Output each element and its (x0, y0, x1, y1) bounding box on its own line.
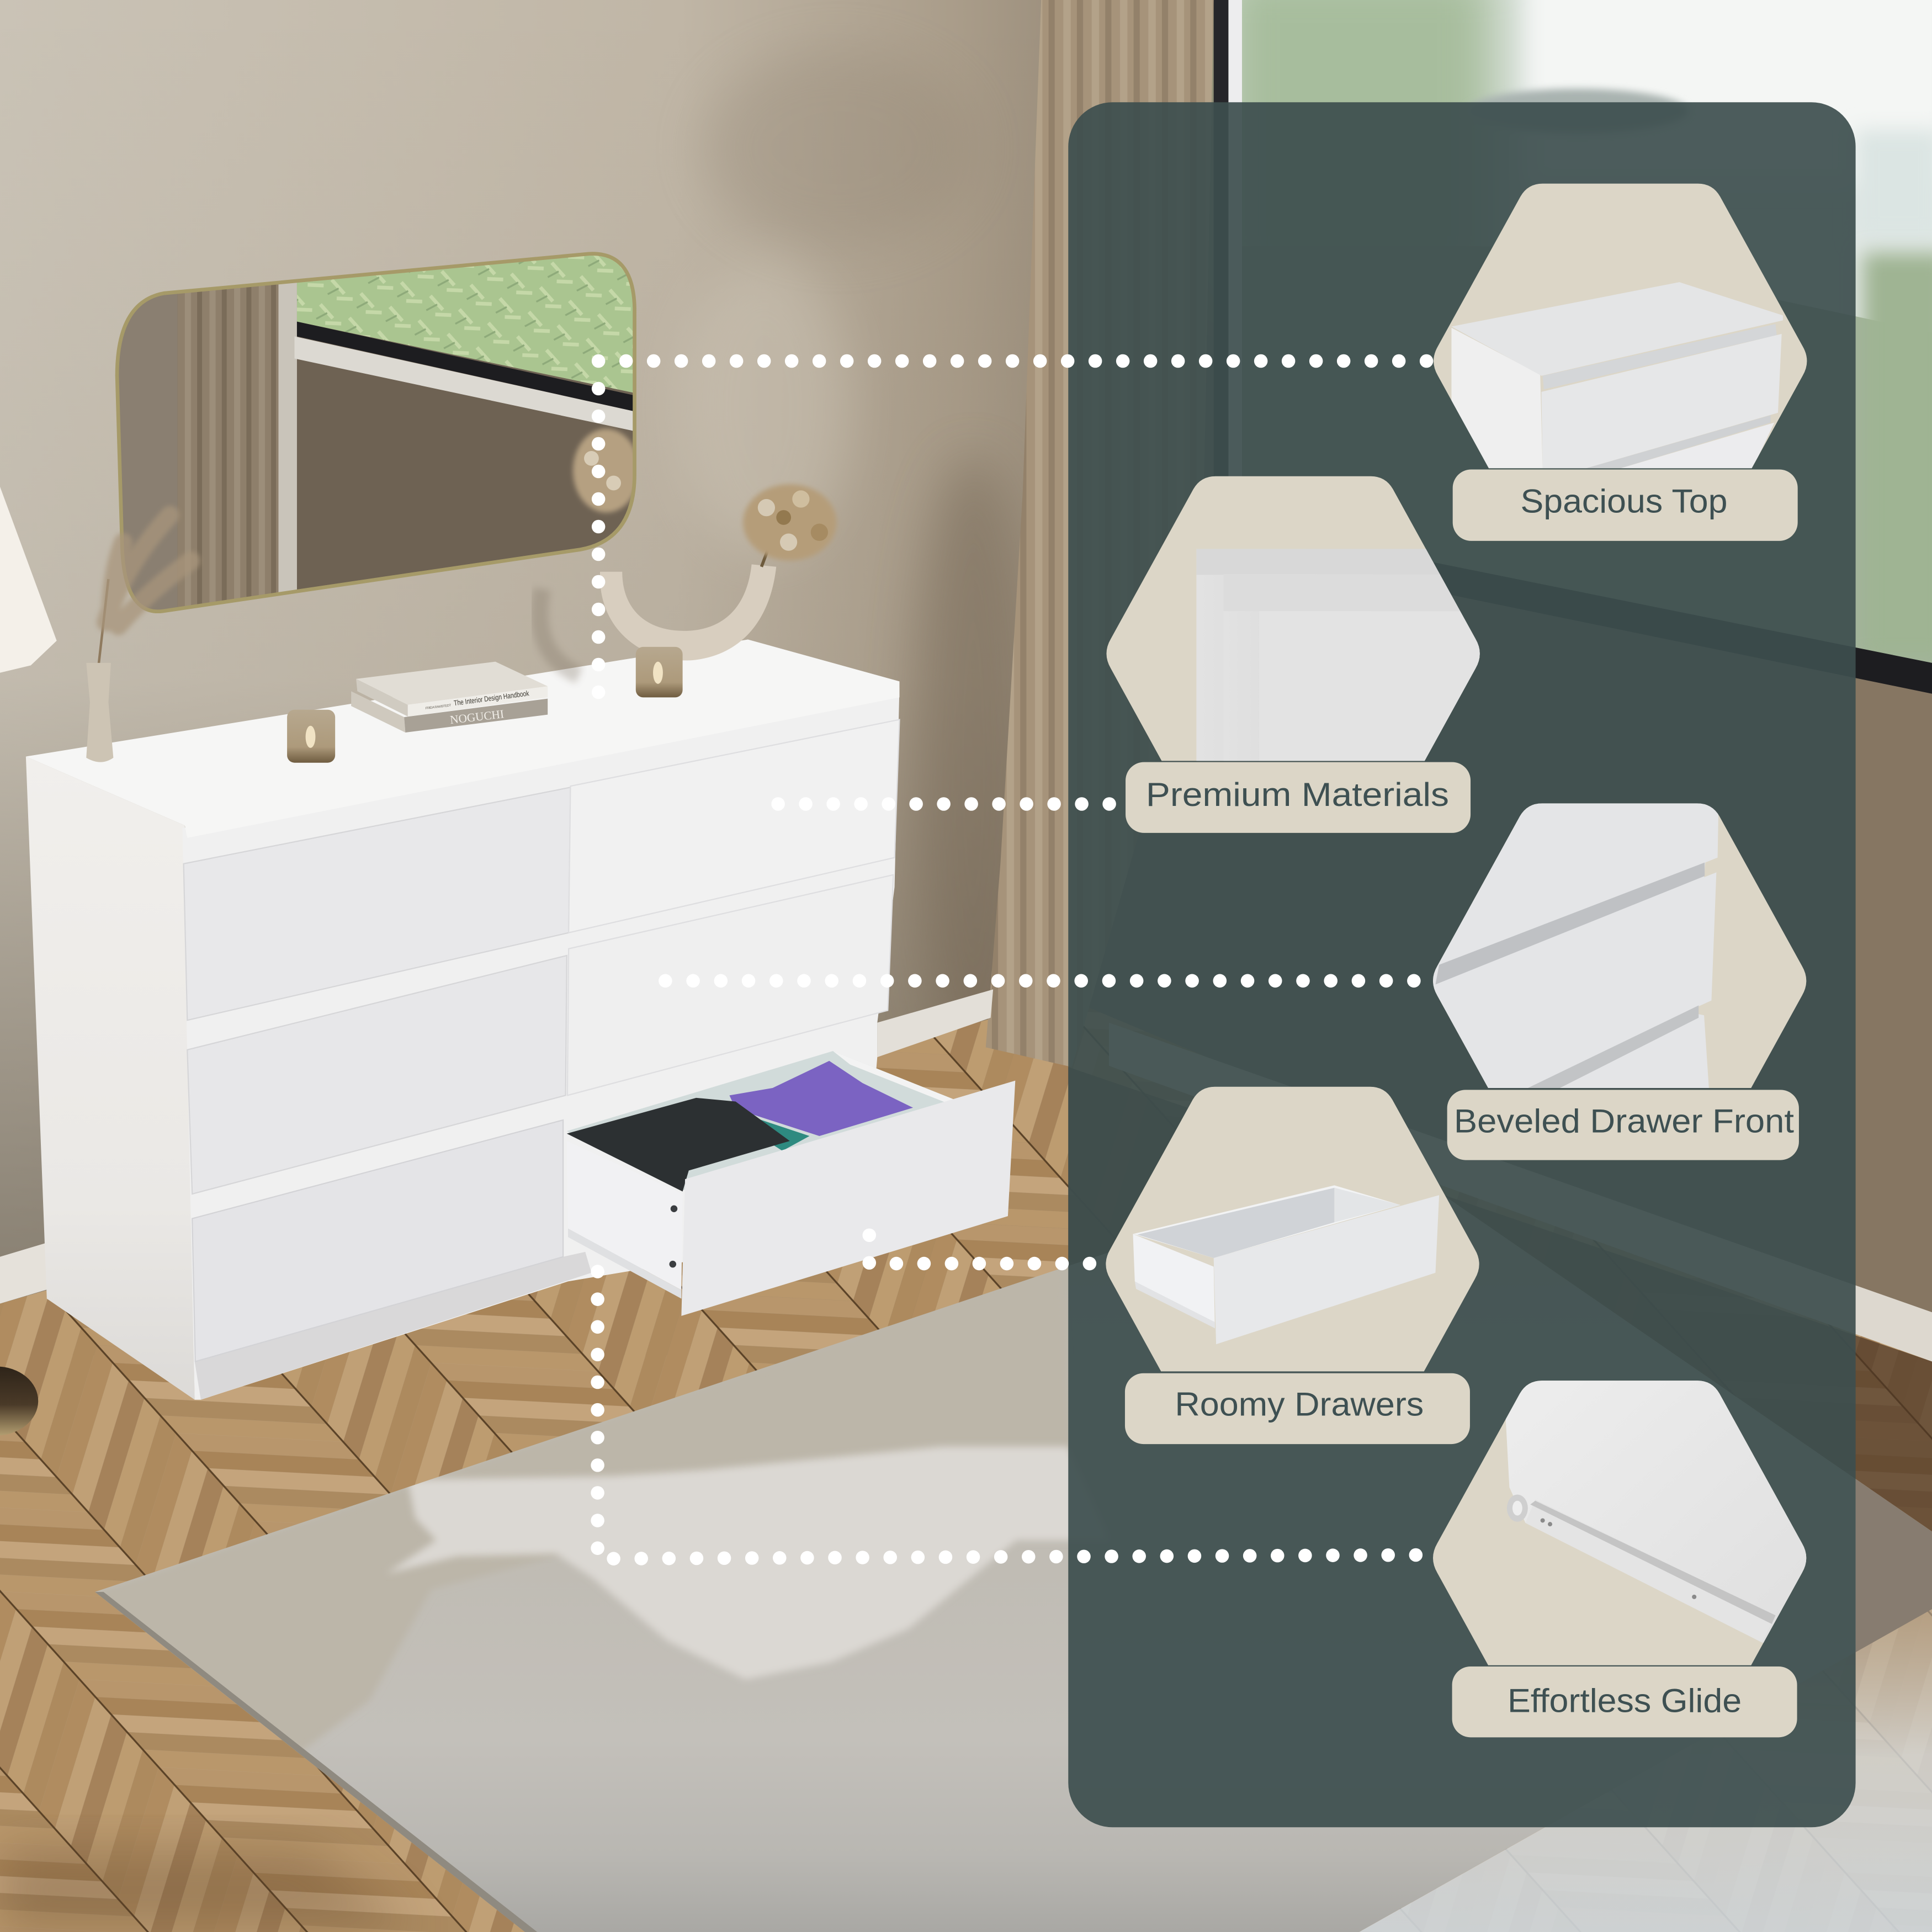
label: spacious top: Spacious Top (1520, 482, 1727, 520)
connector: spacious top (598, 361, 1428, 695)
dresser top (26, 639, 899, 838)
label: roomy drawers: Roomy Drawers (1175, 1386, 1424, 1423)
dresser carcass front (182, 688, 899, 1400)
stacked books (351, 662, 548, 733)
folded teal shirt (736, 1111, 810, 1151)
window view (1220, 0, 1932, 672)
open drawer (567, 1051, 1015, 1316)
translucent feature panel (1068, 102, 1856, 1827)
feature: effortless glide (1433, 1355, 1836, 1737)
curtain (986, 0, 1214, 1067)
label: effortless glide: Effortless Glide (1508, 1682, 1742, 1719)
mirror reflection (111, 240, 641, 616)
mirror frame (117, 254, 635, 612)
floor (0, 1000, 1932, 1932)
drawer rail (568, 1228, 681, 1299)
upper book title: The Interior Design Handbook (453, 689, 529, 707)
connector: effortless glide (598, 1272, 1421, 1559)
hexagon thumbnail: drawer fronts (1405, 789, 1806, 1089)
connector: roomy drawers (869, 1235, 1092, 1265)
dresser side panel (26, 757, 195, 1400)
drawer bottom left (192, 1120, 563, 1362)
vase body (600, 564, 776, 660)
floor shadow lower left (0, 1848, 419, 1932)
connector: beveled drawer front (665, 978, 1417, 984)
glass candle right (636, 647, 683, 697)
drawer top right (569, 720, 899, 933)
folded black shirt (567, 1098, 790, 1191)
lamp base (0, 1366, 38, 1435)
upper book author: FRIDA RAMSTEDT (425, 704, 452, 710)
label: roomy drawers (1125, 1373, 1470, 1444)
lower book spine (404, 699, 548, 733)
left wall (0, 0, 1232, 1355)
drawer middle right (567, 875, 893, 1095)
glass candle left (287, 710, 335, 763)
upper book cover (356, 662, 548, 705)
hexagon thumbnail: dresser top (1434, 184, 1807, 469)
hexagon thumbnail: layered panels (1106, 476, 1495, 765)
hexagon thumbnail: open drawer box (1106, 1087, 1479, 1371)
wall mirror (111, 240, 641, 616)
drawer top left (184, 787, 570, 1020)
folded purple shirt (729, 1061, 913, 1136)
drawer middle left (187, 956, 567, 1194)
pampas grass (99, 515, 191, 665)
lower book side (351, 691, 405, 733)
vase shadow (540, 589, 579, 675)
drawer interior (567, 1051, 956, 1190)
window frame (1214, 0, 1932, 694)
vase (86, 663, 113, 762)
feature: premium materials (1106, 476, 1495, 833)
base plinth (195, 1252, 591, 1400)
feature: beveled drawer front (1405, 789, 1806, 1160)
right wall (1072, 0, 1932, 1368)
label: effortless glide (1452, 1666, 1797, 1737)
upper book spine (408, 686, 548, 716)
baseboards (0, 989, 1932, 1362)
dresser (26, 639, 1015, 1400)
table lamp shade (0, 487, 57, 673)
lower book title: NOGUCHI (449, 707, 505, 726)
label: spacious top (1453, 469, 1798, 541)
label: premium materials (1126, 762, 1471, 833)
rug (95, 1253, 1932, 1932)
dried hydrangea (743, 484, 837, 567)
label: premium materials: Premium Materials (1146, 776, 1449, 813)
screws (669, 1205, 677, 1267)
label: beveled drawer front (1447, 1090, 1799, 1160)
light floor lower right (1359, 1609, 1932, 1932)
feature: spacious top (1434, 184, 1807, 541)
dark floor area (1068, 1067, 1932, 1532)
curved U vase (540, 484, 837, 675)
pampas vase (86, 515, 191, 762)
drawer side (567, 1141, 683, 1290)
feature: roomy drawers (1106, 1087, 1479, 1444)
upper book side (356, 679, 408, 716)
connector: premium materials (778, 801, 1111, 807)
drawer front (681, 1081, 1015, 1316)
label: beveled drawer front: Beveled Drawer Front (1454, 1102, 1794, 1139)
hexagon thumbnail: drawer slide (1433, 1355, 1836, 1665)
